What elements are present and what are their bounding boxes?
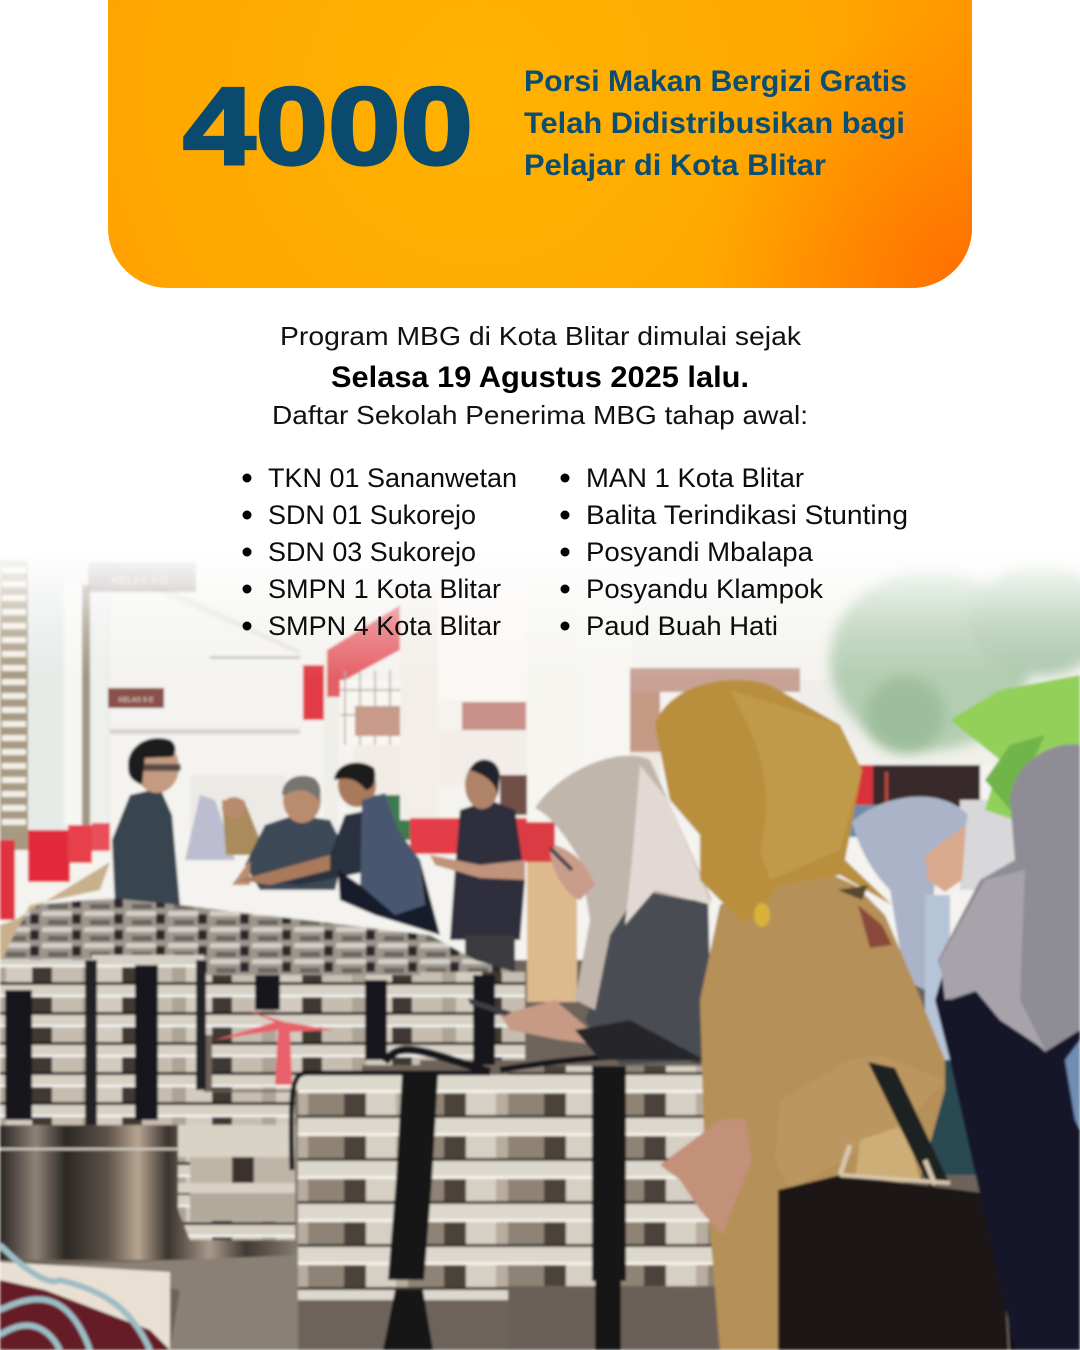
photo: young man with hijab woman <box>240 763 440 935</box>
school list: left column: SMPN 4 Kota Blitar <box>268 611 501 641</box>
photo: mirror-like stainless table and reflections <box>0 1125 300 1350</box>
photo: building background <box>0 550 1080 1350</box>
school list: right column: Posyandu Klampok <box>586 574 824 604</box>
photo: front right tray stack with black strap <box>500 1056 716 1350</box>
photo: man with glasses <box>112 738 181 905</box>
school list: left column: SMPN 1 Kota Blitar <box>268 574 501 604</box>
school list: left column: SDN 01 Sukorejo <box>268 500 476 530</box>
school list: right column: Posyandi Mbalapa <box>586 537 814 567</box>
headline text: Porsi Makan Bergizi Gratis <box>524 65 907 98</box>
sign: room plate 9 E: KELAS 9 E <box>118 697 154 704</box>
header panel: orange banner <box>108 0 972 288</box>
photo: bag at bottom left with blue straps <box>0 1245 170 1350</box>
school list: left column: SDN 03 Sukorejo <box>268 537 476 567</box>
photo: officials preparing stacked stainless meal trays <box>0 550 1080 1350</box>
photo: man in dark suit <box>430 760 525 975</box>
headline text: Pelajar di Kota Blitar <box>524 149 826 182</box>
sign: room plate 9 D <box>88 562 196 592</box>
headline text <box>524 65 907 182</box>
sign: room plate 9 E <box>108 688 164 708</box>
school list: right column: Balita Terindikasi Stunting <box>586 500 908 530</box>
school list: right column <box>560 463 908 641</box>
photo: black handbag <box>778 1062 1030 1350</box>
photo: far rows of trays <box>0 862 525 1000</box>
photo fade to white <box>0 548 1080 678</box>
photo: woman in blue hijab <box>852 797 980 1175</box>
school list: left column: TKN 01 Sananwetan <box>268 463 517 493</box>
school list: right column: Paud Buah Hati <box>586 611 778 641</box>
intro text block <box>272 321 808 430</box>
school list: left column <box>242 463 517 641</box>
photo: pink ribbon <box>215 1010 335 1085</box>
intro text block: Selasa 19 Agustus 2025 lalu. <box>331 361 749 394</box>
headline number: 4000 <box>183 65 473 188</box>
intro text block: Program MBG di Kota Blitar dimulai sejak <box>280 321 802 351</box>
photo: woman at right with grey hijab <box>935 744 1080 1350</box>
intro text block: Daftar Sekolah Penerima MBG tahap awal: <box>272 400 808 430</box>
photo: people in the background <box>185 795 266 860</box>
red wall bases at left <box>0 823 110 920</box>
photo: woman in grey hijab <box>468 756 712 1065</box>
photo: woman in gold hijab and khaki uniform <box>655 680 945 1350</box>
sign: room plate 9 D: KELAS 9 D <box>112 575 168 587</box>
school list: right column: MAN 1 Kota Blitar <box>586 463 804 493</box>
photo: middle front tray stack <box>178 1092 295 1240</box>
photo: middle rows of trays <box>0 955 525 1125</box>
photo: trees <box>830 565 1080 820</box>
photo: front left tray stack with black strap <box>291 1050 510 1350</box>
headline text: Telah Didistribusikan bagi <box>524 107 905 140</box>
photo: grey-haired man <box>232 776 345 890</box>
